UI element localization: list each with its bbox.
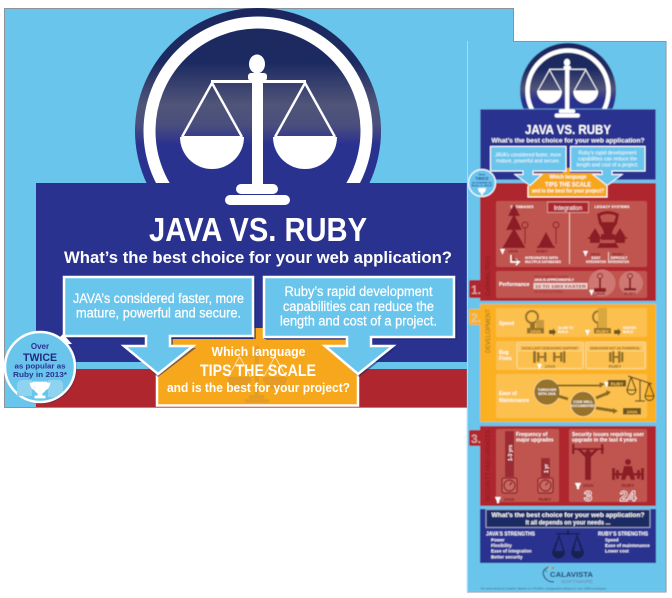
panel: speed: FASTER xyxy=(623,326,637,330)
thumbnail orange question box: Which language xyxy=(550,174,587,180)
panel: bug fixes: Fixes xyxy=(499,356,512,362)
list: Java strengths: JAVA’S STRENGTHS xyxy=(486,532,536,538)
panel: performance xyxy=(496,270,647,298)
panel: performance: BENCHMARKS SHOW xyxy=(534,275,569,279)
panel: integration: DATABASES xyxy=(510,205,534,209)
thumbnail badge: TWICE xyxy=(475,176,489,181)
orange question box xyxy=(157,328,358,406)
label: development: DEVELOPMENT xyxy=(486,309,492,353)
icon: dark scale xyxy=(552,530,584,558)
icon: stacked weights xyxy=(503,204,559,248)
panel: performance: RUBY xyxy=(624,291,636,296)
panel: speed: JAVA xyxy=(530,329,542,334)
panel: integration: JAVA xyxy=(508,248,518,254)
panel: full infographic thumbnail xyxy=(467,42,666,592)
badge: twice as popular: TWICE xyxy=(23,352,57,364)
panel: major upgrades: RUBY xyxy=(539,497,551,502)
thumbnail callout: Java xyxy=(490,146,566,186)
panel: integration: RUBY xyxy=(536,248,548,254)
footnote: *As determined by Codelivr. Based on 175,000+ configuration listings by over 130% employers. xyxy=(480,586,607,590)
panel: performance: 10 TO 100X FASTER xyxy=(535,284,587,289)
panel: speed: RUBY xyxy=(596,329,609,334)
thumbnail orange question box: TIPS THE SCALE xyxy=(545,182,592,188)
red band xyxy=(36,369,467,407)
thumbnail callout: Ruby: length and cost of a project. xyxy=(576,162,638,168)
thumbnail callout: Ruby: capabilities can reduce the xyxy=(578,156,637,162)
panel: integration: DIFFICULT xyxy=(611,256,627,260)
panel: ease of maintenance: RUBY xyxy=(611,382,623,386)
panel: speed xyxy=(496,308,647,337)
panel: security issues: 24 xyxy=(620,488,637,505)
panel: integration: INTEGRATION xyxy=(609,260,630,264)
thumbnail orange question box: and is the best for your project? xyxy=(532,188,604,194)
list: Java strengths: Better security xyxy=(491,554,523,560)
panel: bug fixes: EXCELLENT DEBUGGING SUPPORT xyxy=(522,346,578,350)
orange question box: TIPS THE SCALE xyxy=(200,361,316,380)
panel: integration: LEGACY SYSTEMS xyxy=(595,205,630,209)
panel: ease of maintenance: TURNOVER xyxy=(538,388,557,392)
label: capabilities: CAPABILITIES xyxy=(486,256,492,296)
icon: trophy marker xyxy=(500,249,505,254)
panel: security issues xyxy=(569,429,647,505)
callout: Ruby xyxy=(264,277,457,377)
thumbnail badge: Ruby in 2013* xyxy=(472,184,493,188)
logo: Calavista Software: CALAVISTA xyxy=(550,570,594,579)
thumbnail callout: Ruby xyxy=(570,146,645,186)
panel: bug fixes: JAVA xyxy=(544,364,556,369)
logo: Calavista Software xyxy=(543,567,594,584)
icon: trophy xyxy=(30,382,50,398)
logo: Calavista Software: SOFTWARE xyxy=(561,579,593,584)
callout: Ruby: Ruby’s rapid development xyxy=(284,284,433,299)
panel: ease of maintenance: JAVA xyxy=(626,410,638,414)
tab: 1 xyxy=(469,280,483,298)
orange question box: Which language xyxy=(212,345,306,359)
panel: security issues: JAVA xyxy=(582,483,594,488)
panel: ease of maintenance: Ease of xyxy=(499,391,517,397)
tab: 3 xyxy=(469,430,483,446)
panel: major upgrades: JAVA xyxy=(503,497,515,502)
tab: 2: 2. xyxy=(471,311,481,325)
panel: major upgrades: 1-3 yrs xyxy=(508,445,514,461)
panel: integration: EASY xyxy=(592,256,601,260)
panel: integration: Integration xyxy=(554,206,582,212)
orange question box: and is the best for your project? xyxy=(167,381,350,395)
list: Ruby strengths xyxy=(598,532,650,554)
badge: twice as popular: as popular as xyxy=(14,362,66,370)
panel: ease of maintenance: DOCUMENTED xyxy=(571,404,595,408)
list: Java strengths: Ease of integration xyxy=(491,548,532,554)
panel: security issues: 3 xyxy=(584,488,592,505)
panel: integration: INTEGRATES WITH xyxy=(525,256,559,260)
icon: large weight xyxy=(588,211,627,248)
emblem: dome with scale xyxy=(36,8,467,362)
panel: security issues: Security issues requiring user xyxy=(572,432,644,438)
tab: 1: 1. xyxy=(471,283,481,297)
list: Ruby strengths: Lower cost xyxy=(605,548,629,554)
banner question xyxy=(486,510,650,528)
panel: major upgrades: Frequency of xyxy=(516,432,548,438)
list: Ruby strengths: Ease of maintenance xyxy=(605,543,650,548)
subtitle: What’s the best choice for your web application? xyxy=(64,248,452,267)
panel: integration xyxy=(496,201,647,267)
panel: bug fixes: DEBUGGER NOT AS POWERFUL xyxy=(590,346,640,350)
tab: 2 xyxy=(469,309,483,325)
panel: performance: JAVA IS APPROXIMATELY xyxy=(534,278,575,282)
panel: ease of maintenance xyxy=(496,374,654,418)
callout: Ruby: capabilities can reduce the xyxy=(283,299,434,314)
header xyxy=(480,43,656,180)
list: Java strengths: Power xyxy=(491,538,505,542)
panel: performance: Performance xyxy=(499,282,530,288)
banner question: What’s the best choice for your web application? xyxy=(492,513,645,519)
panel: integration: INTEGRATION xyxy=(586,260,607,264)
panel: performance: JAVA xyxy=(595,291,605,296)
panel: speed: BUILD xyxy=(623,330,634,334)
callout: Java xyxy=(64,277,256,377)
header: What’s the best choice for your web application? xyxy=(492,138,645,144)
thumbnail badge xyxy=(468,170,496,196)
panel: integration: JAVA xyxy=(590,252,600,256)
panel: ease of maintenance: WITH JAVA xyxy=(538,392,556,396)
header: JAVA VS. RUBY xyxy=(525,122,611,137)
panel: bug fixes xyxy=(496,341,647,370)
label: security and updates: SECURITY AND UPDATES xyxy=(486,430,492,502)
thumbnail badge: Over xyxy=(479,172,486,176)
panel: integration: MULTIPLE DATABASES xyxy=(525,260,562,264)
list: Java strengths: Flexibility xyxy=(491,543,512,548)
section: conclusion xyxy=(480,509,656,563)
frame of thumbnail panel xyxy=(467,41,666,592)
panel: speed: SLOW TO xyxy=(558,326,574,330)
callout: Java: JAVA’s considered faster, more xyxy=(73,291,244,306)
thumbnail callout: Java: mature, powerful and secure. xyxy=(496,158,560,164)
thumbnail orange question box xyxy=(528,168,607,197)
panel: bug fixes: Bug xyxy=(499,350,509,356)
panel: major upgrades: 1 yr xyxy=(544,464,550,473)
panel: major upgrades: major upgrades xyxy=(516,438,554,444)
panel: major upgrades xyxy=(495,429,559,503)
badge: twice as popular xyxy=(5,332,77,404)
thumbnail callout: Java: JAVA’s considered faster, more xyxy=(495,152,561,158)
badge: twice as popular: Over xyxy=(31,342,49,351)
panel: performance: IN EXECUTING xyxy=(534,290,564,294)
panel: security issues: RUBY xyxy=(622,483,634,488)
list: Ruby strengths: Speed xyxy=(605,538,619,542)
section 1: capabilities xyxy=(469,183,656,301)
icon: balance scale xyxy=(180,54,337,205)
callout: Ruby: length and cost of a project. xyxy=(280,314,437,328)
icon: Java lifter xyxy=(572,444,604,480)
panel: speed: Speed xyxy=(499,321,514,327)
section 3: security and updates xyxy=(469,426,656,506)
list: Ruby strengths: RUBY’S STRENGTHS xyxy=(598,532,649,538)
list: Java strengths xyxy=(486,532,536,560)
tab: 3: 3. xyxy=(471,432,481,446)
callout: Java: mature, powerful and secure. xyxy=(76,306,241,320)
panel: integration: RUBY xyxy=(612,252,624,256)
panel: security issues: upgrade in the last 4 years xyxy=(572,438,637,444)
panel: bug fixes: RUBY xyxy=(609,364,621,369)
section 2: development xyxy=(469,304,656,422)
panel: speed: BUILD xyxy=(558,330,569,334)
panel: ease of maintenance: CODE WELL xyxy=(573,400,593,404)
thumbnail badge: as popular as xyxy=(472,180,492,184)
panel: enlarged header detail xyxy=(4,8,514,408)
panel: ease of maintenance: Maintenance xyxy=(499,398,530,404)
icon: Ruby lifter xyxy=(612,459,644,480)
icon: tilted scale xyxy=(627,376,654,401)
title: JAVA VS. RUBY xyxy=(149,211,367,248)
banner question: It all depends on your needs ... xyxy=(526,520,611,526)
thumbnail callout: Ruby: Ruby’s rapid development xyxy=(578,150,637,156)
watermark scale xyxy=(227,346,287,403)
badge: twice as popular: Ruby in 2013* xyxy=(13,370,67,379)
